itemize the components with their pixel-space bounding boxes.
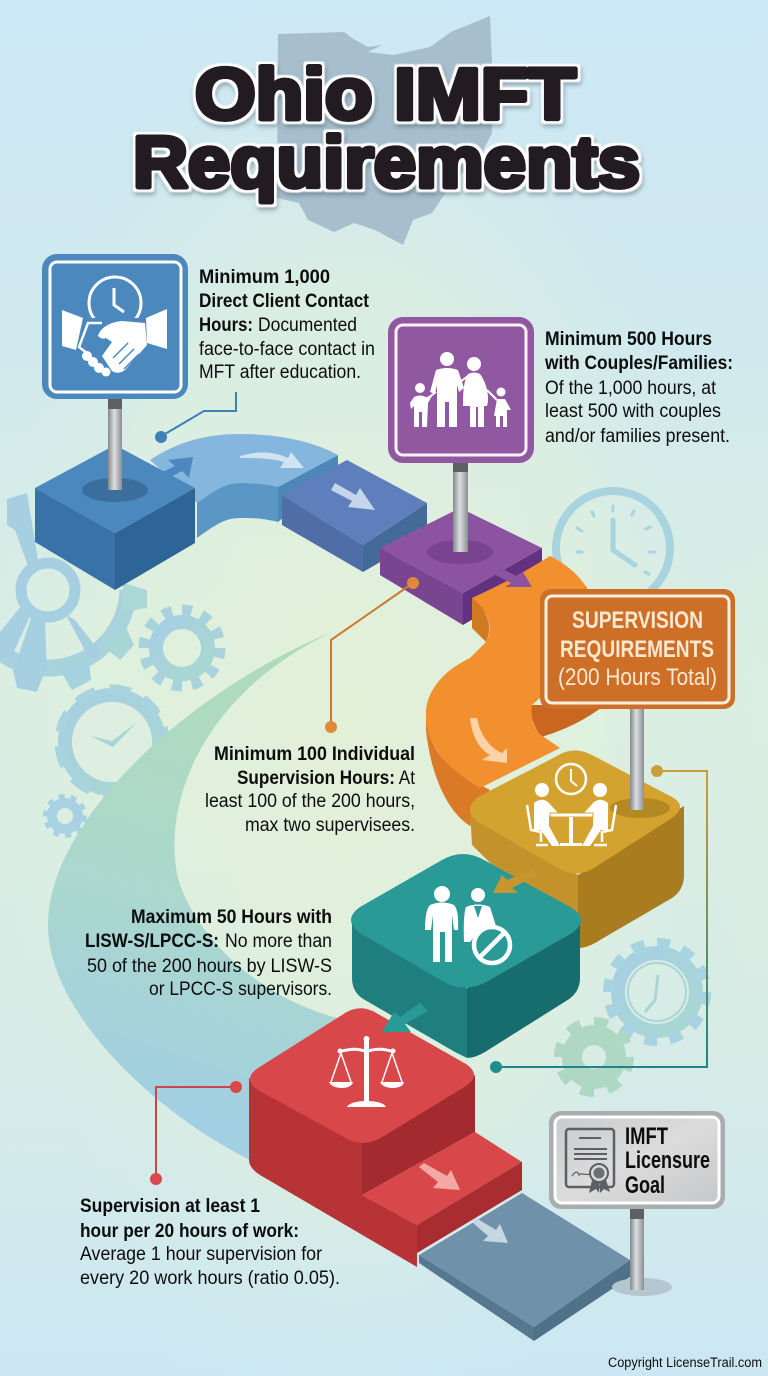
- sign: family icon: [388, 317, 534, 463]
- arrow: periwinkle step: [331, 483, 375, 510]
- sign: IMFT licensure goal: Licensure: [625, 1147, 710, 1174]
- text: couples and families: least 500 with couples: [545, 401, 721, 422]
- text: individual supervision: max two supervisees.: [245, 815, 415, 836]
- text: supervision ratio: Supervision at least 1: [80, 1196, 260, 1217]
- block: periwinkle step: [282, 460, 427, 572]
- text: couples and families: [544, 329, 733, 447]
- block: step 4 teal: [351, 854, 581, 1058]
- connector: individual supervision: [325, 577, 419, 733]
- pole: licensure goal: [612, 1209, 672, 1296]
- text: maximum with LISW-S: No more than: [225, 931, 332, 952]
- sign: IMFT licensure goal: [549, 1111, 725, 1209]
- block: step 2 purple: [380, 508, 542, 625]
- decorative clock gear: [59, 689, 165, 795]
- text: direct client contact: face-to-face contact in: [199, 339, 375, 360]
- block: step 1 blue: [35, 445, 195, 590]
- block: final slate step: [419, 1193, 630, 1341]
- arrow: slate step: [472, 1218, 508, 1243]
- sign: IMFT licensure goal: Goal: [625, 1172, 665, 1199]
- icon: scales of justice: [329, 1036, 404, 1107]
- swoosh band: [48, 632, 345, 1160]
- sign: handshake icon: [42, 254, 188, 399]
- text: maximum with LISW-S: [85, 907, 332, 1000]
- arrow: orange curved: [470, 718, 507, 763]
- connector: red: [150, 1081, 242, 1185]
- text: individual supervision: Minimum 100 Individual: [214, 744, 415, 765]
- sign: supervision requirements: REQUIREMENTS: [560, 636, 714, 663]
- text: maximum with LISW-S: or LPCC-S supervisors.: [149, 979, 332, 1000]
- sign: supervision requirements: SUPERVISION: [572, 607, 703, 634]
- pole: step 1: [108, 399, 122, 490]
- text: direct client contact: [199, 267, 375, 383]
- text: maximum with LISW-S: 50 of the 200 hours by LISW-S: [87, 956, 332, 977]
- title: [133, 55, 640, 203]
- orange winding path: [426, 556, 605, 826]
- icon: clock and handshake: [62, 277, 167, 376]
- arrow: purple to orange: [494, 569, 532, 587]
- text: individual supervision: [205, 744, 416, 836]
- icon: supervisor restricted: [425, 886, 510, 963]
- text: direct client contact: Documented: [258, 315, 357, 336]
- block: step 5 red: [249, 1008, 522, 1267]
- text: couples and families: and/or families present.: [545, 426, 730, 447]
- copyright: Copyright LicenseTrail.com: [608, 1355, 762, 1370]
- decorative gear: [144, 610, 220, 686]
- icon: family: [410, 352, 511, 427]
- title: Ohio IMFT: [195, 55, 576, 135]
- decorative clock top right: [556, 491, 670, 605]
- decorative green gear: [559, 1022, 629, 1092]
- text: supervision ratio: Average 1 hour supervision for: [80, 1244, 323, 1265]
- arrow: teal to red: [382, 1003, 428, 1032]
- text: couples and families: Minimum 500 Hours: [545, 329, 712, 350]
- pole: step 3: [630, 709, 644, 810]
- arrow: red step: [419, 1163, 460, 1190]
- text: direct client contact: Minimum 1,000: [199, 267, 330, 288]
- curved blue path: [150, 434, 338, 538]
- text: supervision ratio: hour per 20 hours of work:: [80, 1221, 299, 1242]
- arrow: step 1: [152, 457, 193, 483]
- text: couples and families: with Couples/Families:: [544, 353, 733, 374]
- text: individual supervision: Supervision Hours: At: [237, 768, 416, 789]
- text: supervision ratio: every 20 work hours (ratio 0.05).: [80, 1268, 340, 1289]
- text: direct client contact: Hours:: [199, 315, 253, 336]
- sign: IMFT licensure goal: IMFT: [625, 1123, 668, 1150]
- small decorative gear: [46, 797, 84, 835]
- block: step 3 gold: [470, 750, 684, 948]
- text: direct client contact: Direct Client Contact: [199, 291, 370, 312]
- text: maximum with LISW-S: LISW-S/LPCC-S:: [85, 931, 219, 952]
- text: couples and families: Of the 1,000 hours, at: [545, 378, 717, 399]
- Ohio state silhouette: [277, 16, 492, 245]
- decorative clock gear lower right: [609, 944, 705, 1040]
- connector: gold to teal: [490, 765, 707, 1073]
- text: direct client contact: MFT after education.: [199, 362, 361, 383]
- sign: supervision requirements: [540, 589, 735, 709]
- text: supervision ratio: [80, 1196, 340, 1289]
- text: individual supervision: least 100 of the 200 hours,: [205, 791, 415, 812]
- title: Requirements: [133, 123, 640, 203]
- decorative gear with spokes, left: [0, 493, 147, 692]
- arrow: gold to teal: [493, 869, 537, 893]
- pole: step 2: [453, 462, 468, 552]
- icon: certificate: [566, 1129, 614, 1193]
- arrow on curve: [240, 452, 304, 468]
- text: maximum with LISW-S: Maximum 50 Hours with: [131, 907, 332, 928]
- connector: client contact: [156, 392, 236, 442]
- icon: meeting at table: [527, 764, 616, 846]
- sign: supervision requirements: (200 Hours Total): [558, 664, 717, 691]
